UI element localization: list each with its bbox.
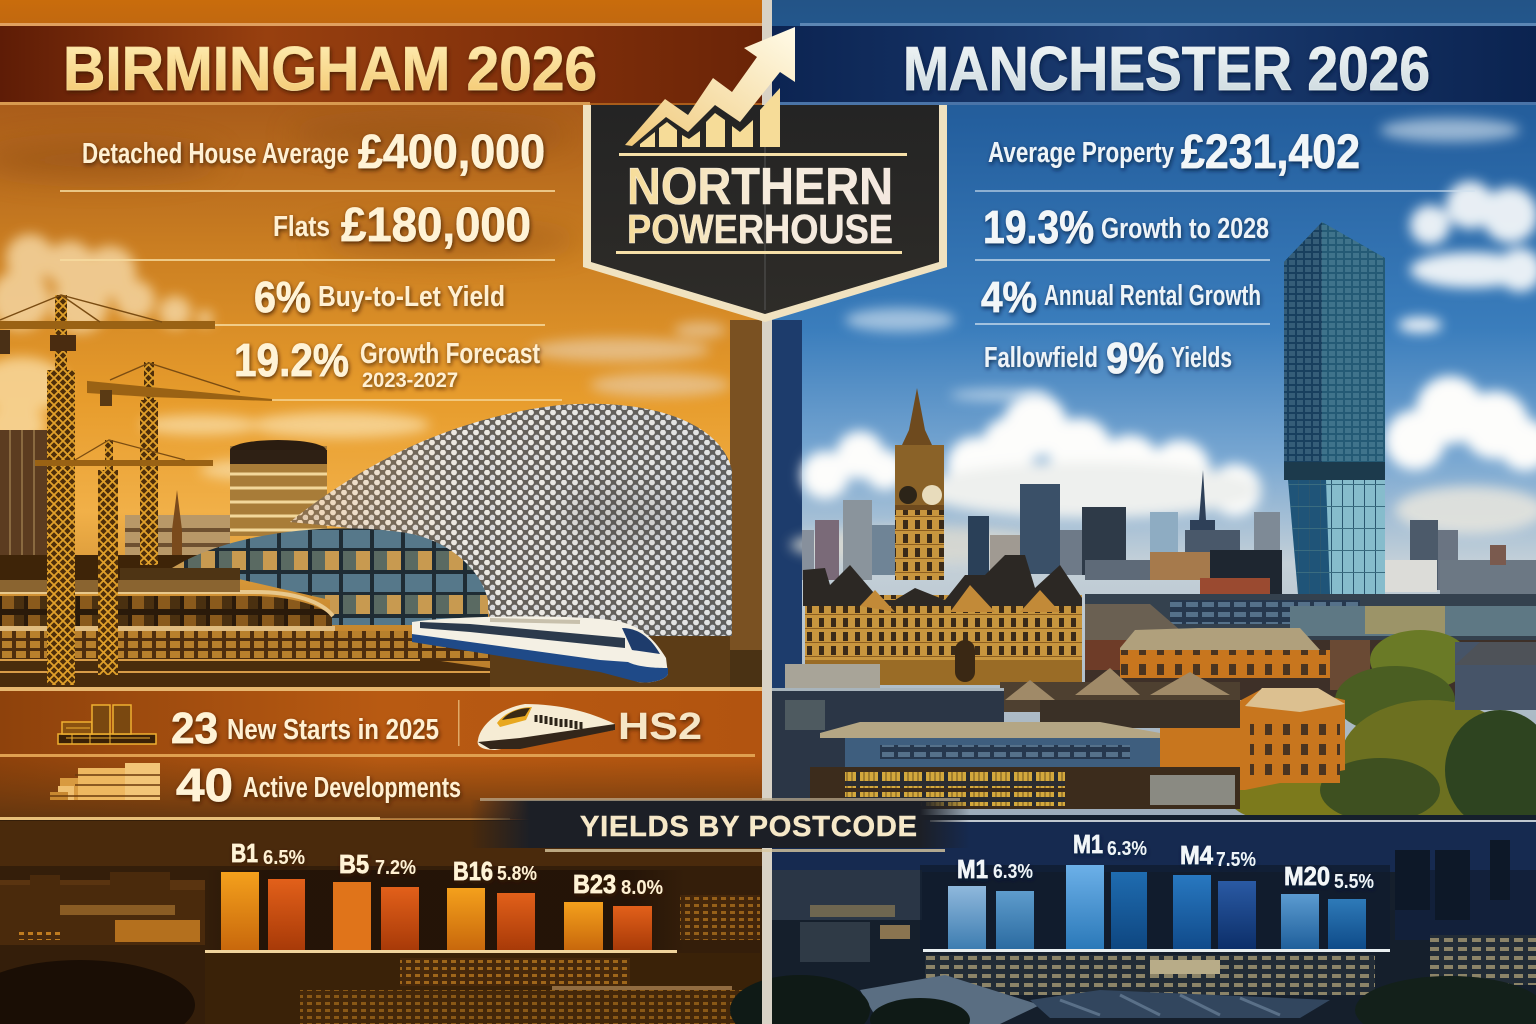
header: Birmingham title band (0, 23, 762, 105)
panel: Manchester key stats: £231,402 (1181, 126, 1360, 179)
header: Manchester title band (772, 23, 1536, 105)
text: 40 active developments (176, 759, 461, 811)
bar chart: Birmingham yields: 5.8% (497, 863, 537, 885)
icon: bullet train (412, 616, 668, 683)
badge: Northern Powerhouse shield: POWERHOUSE (627, 206, 893, 252)
panel: Manchester key stats: Annual Rental Growth (1044, 280, 1261, 312)
bar chart: Birmingham yields: B23 (573, 869, 616, 899)
icon: distant city blocks (802, 470, 1536, 600)
bar chart: Manchester yields: M20 (1284, 861, 1330, 891)
bar chart: Manchester yields: M4 (1180, 840, 1213, 870)
bar chart: Birmingham yields: B16 (453, 856, 493, 886)
icon: town hall clock tower (895, 388, 944, 580)
panel: Manchester background sky (772, 0, 1536, 1024)
panel: Manchester key stats: 9% (1106, 334, 1164, 383)
bar chart: Manchester yields: 6.3% (993, 861, 1033, 883)
panel: Birmingham bottom silhouette (0, 820, 764, 1024)
icon: construction cranes (0, 295, 272, 685)
text: 23 new starts: New Starts in 2025 (227, 714, 439, 746)
header: Birmingham title band: BIRMINGHAM 2026 (63, 35, 597, 104)
icon: trees (1230, 630, 1536, 830)
panel: Birmingham key stats: 6% (254, 273, 311, 322)
bar chart: Birmingham yields: 6.5% (263, 847, 305, 869)
bar chart: Manchester yields: 6.3% (1107, 838, 1147, 860)
panel: Manchester key stats: Yields (1171, 342, 1232, 374)
text: 23 new starts: 23 (171, 704, 218, 753)
bar chart: Manchester yields: 5.5% (1334, 871, 1374, 893)
icon: midground office blocks (1085, 594, 1536, 700)
panel: Manchester key stats: Fallowfield (984, 342, 1098, 374)
icon: steps (0, 658, 545, 690)
icon: glass atrium (172, 528, 488, 625)
panel: Manchester key stats: 4% (981, 273, 1037, 322)
text: 40 active developments: 40 (176, 759, 233, 811)
bar chart: Birmingham yields: 8.0% (621, 877, 663, 899)
icon: buildings 1 (58, 705, 156, 744)
badge: Northern Powerhouse shield: NORTHERN (627, 158, 893, 216)
text: HS2 label: HS2 (618, 706, 702, 748)
header: Manchester title band: MANCHESTER 2026 (903, 35, 1430, 104)
bar chart: Manchester yields: 7.5% (1216, 849, 1256, 871)
panel: Manchester key stats: Average Property (988, 137, 1174, 169)
icon: Selfridges building (290, 404, 732, 636)
icon: rotunda tower (230, 440, 327, 536)
panel: Birmingham key stats: 19.2% (234, 334, 349, 386)
icon: town hall main building (785, 555, 1082, 688)
bar chart: Manchester yields: M1 (1073, 829, 1103, 859)
panel: Birmingham key stats: 2023-2027 (362, 369, 458, 392)
bar chart: Manchester yields: M1 (957, 854, 988, 884)
panel: Birmingham stat strip (0, 687, 764, 821)
panel: Birmingham key stats: £400,000 (358, 126, 545, 179)
icon: foreground long blue building (810, 722, 1240, 809)
heading: yields by postcode: YIELDS BY POSTCODE (580, 811, 917, 843)
bar chart: Birmingham yields: 7.2% (375, 857, 416, 879)
bar chart: Birmingham yields: B5 (339, 849, 369, 879)
panel: Birmingham key stats: Flats (273, 211, 330, 243)
text: 40 active developments: Active Developments (243, 772, 461, 804)
bar chart: Birmingham yields (205, 838, 677, 953)
panel: Manchester key stats: 19.3% (983, 201, 1094, 253)
illustration: Birmingham skyline with Bullring (0, 295, 764, 690)
icon: rising chart arrow (625, 27, 795, 147)
panel: Birmingham background sky (0, 0, 764, 1024)
panel: Birmingham key stats: Growth Forecast (360, 338, 540, 370)
icon: buildings 2 (50, 763, 160, 800)
panel: Manchester key stats (975, 126, 1475, 383)
badge: Northern Powerhouse shield (583, 27, 947, 322)
icon: curved low-rise building (0, 580, 490, 661)
icon: Beetham tower (1284, 222, 1385, 594)
icon: HS2 train (478, 704, 615, 750)
panel: Birmingham key stats (60, 126, 562, 401)
panel: Birmingham key stats: Detached House Average (82, 138, 349, 170)
panel: Birmingham key stats: Buy-to-Let Yield (318, 281, 505, 313)
panel: Birmingham key stats: £180,000 (341, 199, 531, 252)
text: 23 new starts (171, 704, 439, 753)
panel: Manchester key stats: Growth to 2028 (1101, 213, 1269, 245)
icon: foreground slate block (772, 688, 1004, 808)
icon: brick terrace buildings (1000, 628, 1370, 712)
panel: Manchester bottom silhouette (730, 815, 1536, 1024)
illustration: Manchester skyline with town hall (772, 222, 1536, 830)
icon: foreground brick block (1040, 688, 1345, 790)
bar chart: Birmingham yields: B1 (231, 838, 258, 868)
divider: central vertical line (762, 0, 772, 1024)
bar chart: Manchester yields (920, 829, 1390, 952)
heading: yields by postcode (470, 798, 970, 852)
